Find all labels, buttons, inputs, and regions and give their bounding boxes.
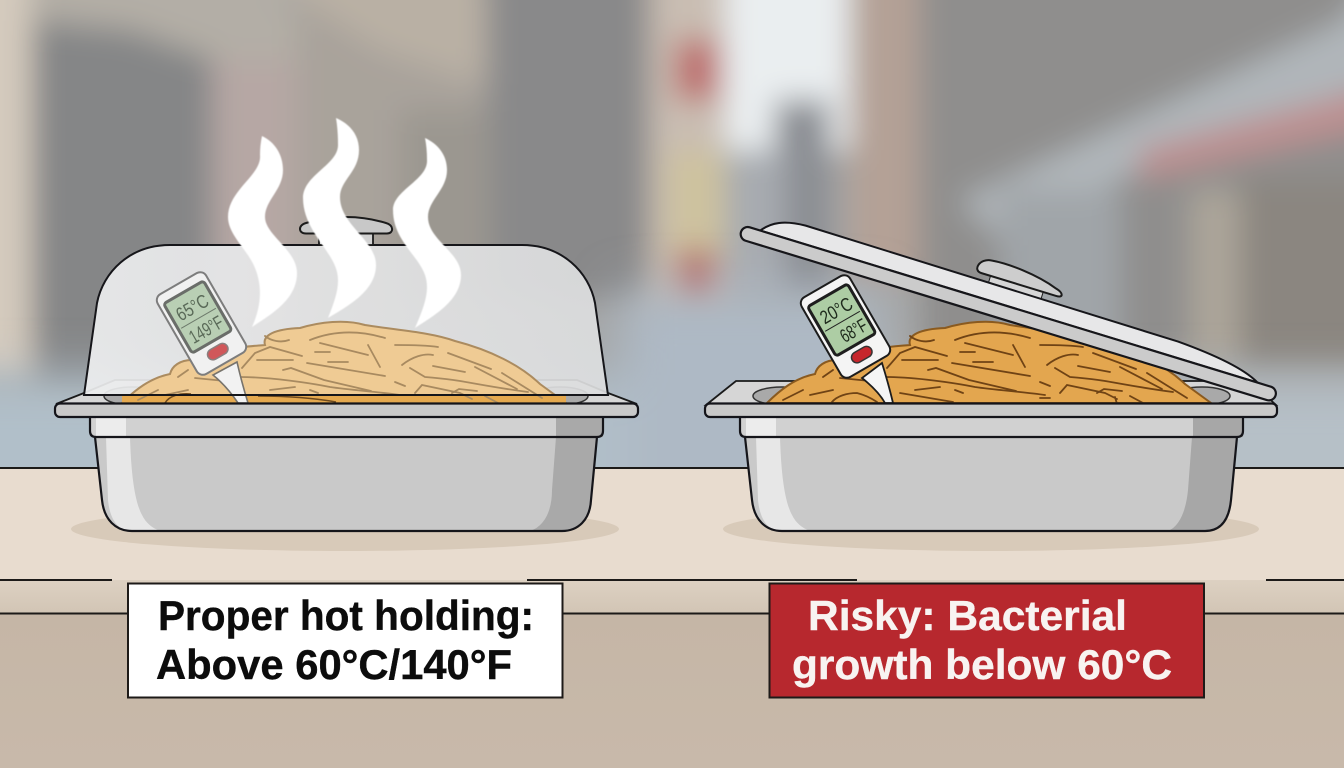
pan wells [104, 387, 588, 405]
table counter [0, 467, 1344, 768]
steam wisps [228, 118, 461, 328]
dome outline [84, 245, 608, 395]
shadow under left pan [71, 507, 619, 551]
blurred street background [0, 0, 1344, 550]
pan wells [753, 387, 1230, 405]
label: risky bacterial growth: growth below 60°C [792, 641, 1172, 688]
tilted lid [739, 187, 1289, 402]
rim top [706, 381, 1276, 405]
food, cooling [767, 322, 1211, 404]
pan rim [705, 404, 1277, 417]
thermometer 20°C / 68°F: 68°F [837, 315, 871, 347]
thermometer 20°C / 68°F [798, 273, 893, 380]
thermometer 65°C / 149°F [154, 270, 249, 377]
shadow under right pan [723, 507, 1259, 551]
dome lid glass [84, 245, 608, 395]
pan rim [55, 404, 638, 417]
lid knob [973, 256, 1066, 306]
pan body [90, 417, 603, 531]
thermometer 20°C / 68°F: 20°C [817, 294, 857, 329]
thermometer probe [213, 362, 248, 403]
thermometer probe [862, 363, 893, 403]
lid surface [760, 213, 1263, 383]
left pan: proper hot holding [55, 118, 638, 531]
rim top [56, 380, 637, 404]
thermometer 65°C / 149°F: 65°C [173, 291, 213, 326]
label: proper hot holding [128, 584, 562, 698]
thermometer 65°C / 149°F: 149°F [186, 312, 227, 348]
label: proper hot holding: Proper hot holding: [158, 592, 534, 639]
lid flange [739, 225, 1278, 402]
label: risky bacterial growth: Risky: Bacterial [808, 592, 1127, 639]
food, warm [122, 322, 566, 403]
pan body [740, 417, 1243, 531]
right pan: risky [705, 187, 1289, 531]
dome knob [300, 217, 392, 245]
label: proper hot holding: Above 60°C/140°F [156, 641, 512, 688]
label: risky bacterial growth [770, 584, 1204, 698]
